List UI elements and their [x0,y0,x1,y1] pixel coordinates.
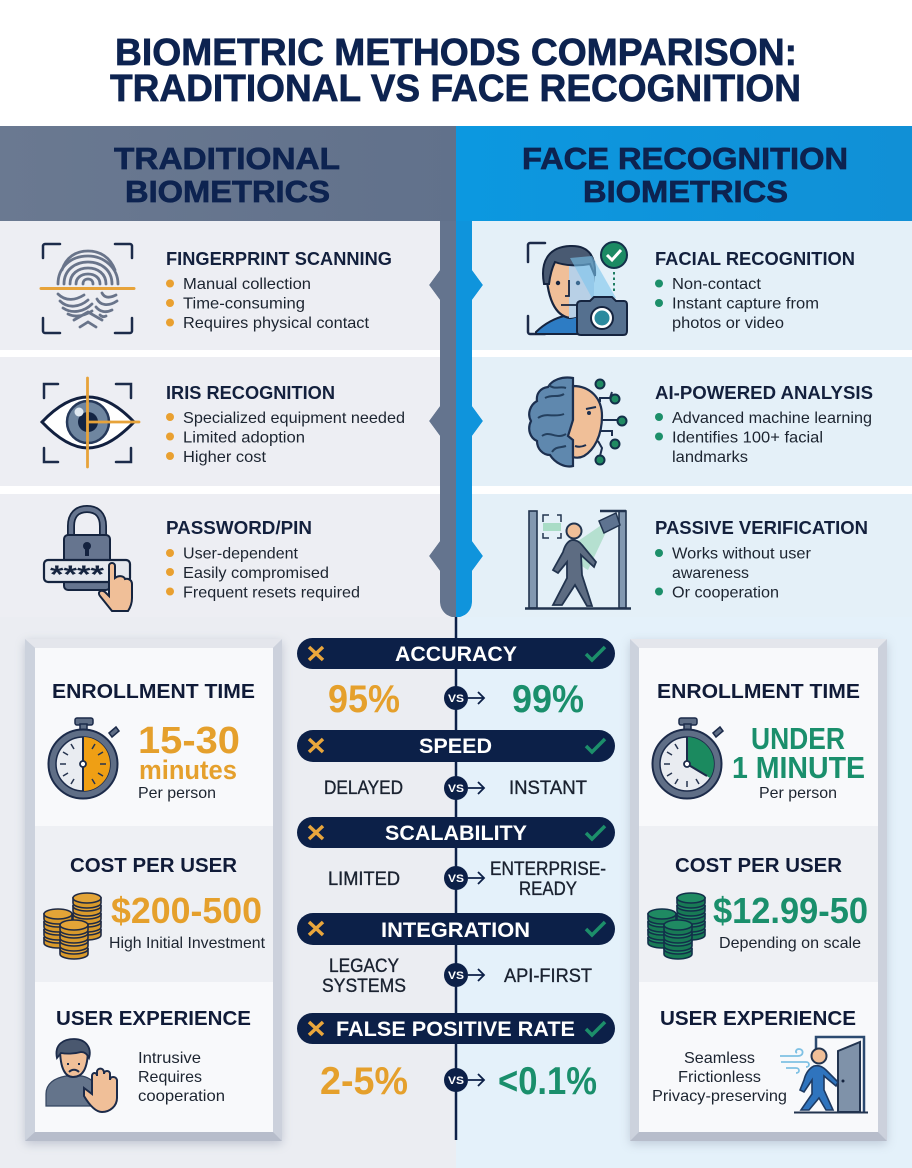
text: user experience traditional: Intrusive [138,1050,201,1067]
values: limited vs enterprise-ready: ENTERPRISE- [490,859,606,880]
icon: face with camera [528,242,627,335]
pill: accuracy: ACCURACY [395,643,517,666]
bullets: ai [655,410,872,466]
values: legacy systems vs api-first [322,956,592,997]
values: delayed vs instant: DELAYED [324,778,403,799]
stat: $12.99-50: Depending on scale [719,935,861,952]
icon: stopwatch green wedge [652,718,723,798]
comparison row: integration [297,913,615,997]
stat: 15-30 minutes: Per person [138,785,216,802]
text: cost per user heading: COST PER USER [70,855,238,877]
stat: under 1 minute [732,721,865,802]
pill: speed [297,730,615,762]
bullets: fingerprint [166,276,370,332]
stat: 15-30 minutes [138,720,240,802]
values: 95% vs 99%: 95% [328,678,400,721]
bullets: password: Easily compromised [183,565,329,582]
stat: $200-500 [109,890,266,952]
text: user experience heading: USER EXPERIENCE [56,1008,251,1030]
stat: under 1 minute: Per person [759,785,837,802]
bullets: ai: Identifies 100+ facial [672,430,823,446]
text: password heading: PASSWORD/PIN [166,518,312,538]
icon: padlock with keypad: **** [50,561,104,589]
icon: fingerprint [41,244,134,333]
pill: speed: SPEED [419,735,492,758]
stat: $12.99-50 [713,890,868,952]
bullets: facial: Non-contact [672,276,762,293]
stat: under 1 minute: UNDER [751,721,845,756]
text: fingerprint heading: FINGERPRINT SCANNING [166,249,392,269]
bullets: iris [166,410,405,466]
bullets: fingerprint: Time-consuming [183,296,305,312]
text: user experience face recognition: Seamless [684,1050,755,1067]
panel: iris recognition [0,357,440,486]
text: user experience face recognition: Frictionless [678,1069,761,1086]
pill: false positive rate: FALSE POSITIVE RATE [336,1018,575,1041]
icon: stopwatch half orange [48,718,119,798]
panel: face recognition metrics card [630,639,887,1144]
values: 2-5% vs <0.1%: <0.1% [498,1060,597,1103]
values: delayed vs instant [324,776,587,800]
center comparison axis [455,617,457,1140]
title [110,32,801,110]
panel: traditional biometrics header: TRADITIONAL [114,141,340,176]
stat: 15-30 minutes: minutes [139,755,237,785]
icon: green coins [648,893,705,959]
text: user experience traditional: cooperation [138,1088,225,1105]
text: user experience face recognition: Privacy-preserving [652,1088,787,1105]
values: 2-5% vs <0.1%: VS [448,1075,464,1087]
stat: $200-500: $200-500 [111,890,262,931]
pill: accuracy [297,638,615,669]
panel: ai-powered analysis [472,357,912,486]
panel: traditional biometrics header: BIOMETRICS [125,174,330,209]
values: 95% vs 99% [328,678,584,721]
bullets: passive: Works without user [672,546,812,562]
stat: $12.99-50: $12.99-50 [713,890,868,931]
panel: fingerprint scanning [0,221,440,350]
values: 2-5% vs <0.1%: 2-5% [320,1060,408,1103]
bullets: fingerprint: Requires physical contact [183,315,370,332]
title: BIOMETRIC METHODS COMPARISON: [115,32,797,74]
pill: false positive rate [297,1013,615,1044]
panel: traditional metrics card [25,639,282,1144]
panel: traditional biometrics header [0,126,456,221]
comparison row: accuracy [297,638,615,721]
panel: passive verification [462,494,912,617]
values: legacy systems vs api-first: SYSTEMS [322,976,406,997]
values: 95% vs 99%: 99% [512,678,584,721]
pill: integration: INTEGRATION [381,919,530,942]
values: 95% vs 99%: VS [448,693,464,705]
text: user experience heading: USER EXPERIENCE [660,1008,856,1030]
text: enrollment time heading: ENROLLMENT TIME [52,681,255,703]
panel: face recognition biometrics header: FACE RECOGNITION [522,141,848,176]
bullets: facial: photos or video [672,315,784,332]
title: TRADITIONAL VS FACE RECOGNITION [110,68,801,110]
icon: walking person gate [525,511,631,608]
pill: scalability [297,817,615,848]
text: user experience face recognition [652,1050,787,1105]
bullets: ai: landmarks [672,449,748,466]
comparison row: speed [297,730,615,800]
comparison row: false positive rate [297,1013,615,1103]
bullets: iris: Limited adoption [183,430,305,446]
bullets: iris: Higher cost [183,449,267,466]
text: ai heading: AI-POWERED ANALYSIS [655,383,873,403]
icon: padlock with keypad [44,509,132,611]
values: limited vs enterprise-ready [328,859,606,900]
stat: $200-500: High Initial Investment [109,935,266,952]
text: user experience traditional [138,1050,225,1105]
bullets: password [166,546,360,602]
text: passive heading: PASSIVE VERIFICATION [655,518,868,538]
bullets: passive: awareness [672,565,749,582]
text: user experience traditional: Requires [138,1069,202,1086]
panel: facial recognition [472,221,912,350]
bullets: password: User-dependent [183,546,299,562]
values: limited vs enterprise-ready: READY [519,879,577,900]
bullets: ai: Advanced machine learning [672,410,872,427]
values: limited vs enterprise-ready: LIMITED [328,869,400,890]
icon: person with stop hand [46,1039,117,1112]
values: delayed vs instant: INSTANT [509,778,587,799]
text: enrollment time heading: ENROLLMENT TIME [657,681,860,703]
values: legacy systems vs api-first: API-FIRST [504,966,592,987]
stat: 15-30 minutes: 15-30 [138,720,240,762]
values: 2-5% vs <0.1% [320,1060,597,1103]
panel: face recognition biometrics header: BIOMETRICS [583,174,788,209]
values: delayed vs instant: VS [448,783,464,795]
central spine with notches [429,221,483,617]
bullets: passive [655,546,812,602]
icon: orange coins [44,893,101,959]
text: cost per user heading: COST PER USER [675,855,843,877]
bullets: password: Frequent resets required [183,584,360,602]
values: legacy systems vs api-first: LEGACY [329,956,399,977]
bullets: facial: Instant capture from [672,296,819,312]
text: facial heading: FACIAL RECOGNITION [655,249,855,269]
stat: under 1 minute: 1 MINUTE [732,750,865,785]
values: legacy systems vs api-first: VS [448,970,464,982]
bullets: passive: Or cooperation [672,584,779,602]
bullets: facial [655,276,819,332]
bullets: iris: Specialized equipment needed [183,410,405,427]
pill: integration [297,913,615,945]
bullets: fingerprint: Manual collection [183,276,311,293]
icon: brain and face [529,377,626,466]
panel: password pin [0,494,450,617]
icon: eye [42,378,139,467]
text: iris heading: IRIS RECOGNITION [166,383,335,403]
comparison row: scalability [297,817,615,900]
pill: scalability: SCALABILITY [385,822,527,845]
panel: face recognition biometrics header [456,126,912,221]
values: limited vs enterprise-ready: VS [448,873,464,885]
icon: person walking through door [780,1037,868,1112]
